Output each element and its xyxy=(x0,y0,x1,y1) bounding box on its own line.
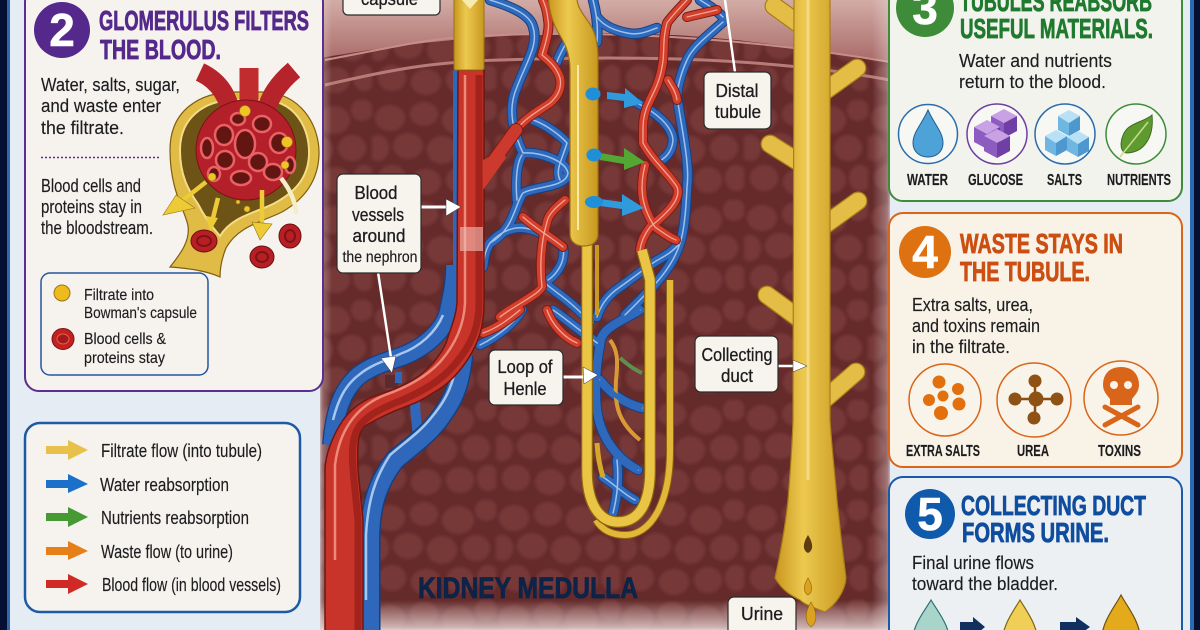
red capillary network xyxy=(483,0,717,343)
icon: glucose: GLUCOSE xyxy=(968,172,1023,189)
icon: urea molecule xyxy=(997,363,1071,460)
large red artery xyxy=(325,70,506,630)
arrow: blood flow xyxy=(46,574,281,595)
heading 5: FORMS URINE. xyxy=(962,517,1109,548)
heading 5 xyxy=(961,490,1146,548)
text: filtrate description xyxy=(41,75,180,138)
vessel junction marker xyxy=(385,372,402,388)
text: waste description: and toxins remain xyxy=(912,316,1040,336)
badge 4: 4 xyxy=(912,226,938,278)
blue capillary network xyxy=(480,0,723,513)
icon: water: WATER xyxy=(907,172,948,189)
icon: salts xyxy=(1035,104,1095,189)
text: urine flows xyxy=(912,553,1058,594)
icon: toxins skull xyxy=(1084,361,1158,460)
label: distal tubule: tubule xyxy=(715,102,761,122)
arrow: water reabsorption: Water reabsorption xyxy=(100,475,229,495)
text: blood cells description: the bloodstream. xyxy=(41,218,153,238)
text: blood cells description: Blood cells and xyxy=(41,176,141,196)
arrow: yellow to amber xyxy=(1060,617,1090,630)
icon: extra salts xyxy=(906,364,981,460)
icon: urea molecule: UREA xyxy=(1017,443,1049,460)
loop of Henle xyxy=(587,240,670,535)
key: filtrate and blood cells: proteins stay xyxy=(84,350,165,367)
central tubule xyxy=(548,0,598,246)
icon: nutrients leaf xyxy=(1106,104,1171,189)
heading 4: WASTE STAYS IN xyxy=(960,228,1123,259)
left page edge xyxy=(0,0,10,630)
text: urine flows: Final urine flows xyxy=(912,553,1034,573)
key: filtrate and blood cells: Filtrate into xyxy=(84,287,154,304)
badge 5: 5 xyxy=(917,488,943,540)
label: blood vessels around the nephron: the nephron xyxy=(342,249,418,266)
key: filtrate and blood cells xyxy=(41,273,208,375)
label: distal tubule xyxy=(704,0,771,129)
text: water and nutrients: Water and nutrients xyxy=(959,51,1112,71)
arrow: water reabsorption xyxy=(46,474,229,495)
label: blood vessels around the nephron: around xyxy=(352,226,406,246)
text: filtrate description: and waste enter xyxy=(41,96,161,116)
panel 2: glomerulus filters the blood xyxy=(25,0,323,391)
text: blood cells description: proteins stay in xyxy=(41,197,142,217)
label: urine: Urine xyxy=(741,604,783,624)
icon: amber urine drop xyxy=(1101,595,1141,630)
icon: dilute urine drop xyxy=(912,600,950,630)
reabsorption arrows xyxy=(585,88,645,216)
badge 2: 2 xyxy=(49,4,75,56)
panel 3: tubules reabsorb useful materials xyxy=(889,0,1182,201)
badge 2 xyxy=(34,2,90,58)
icon: yellow urine drop xyxy=(1002,600,1038,630)
large blue vein upper xyxy=(332,70,456,445)
label: blood vessels around the nephron: vessels xyxy=(352,205,404,225)
text: filtrate description: Water, salts, sugar, xyxy=(41,75,180,95)
heading 3 xyxy=(960,0,1153,44)
key: filtrate and blood cells: Blood cells & xyxy=(84,331,166,348)
text: blood cells description xyxy=(41,176,153,238)
arrow: waste flow xyxy=(46,541,233,562)
heading 4 xyxy=(960,228,1123,287)
label: distal tubule: Distal xyxy=(716,81,758,101)
tissue: kidney medulla background xyxy=(320,0,890,630)
icon: water xyxy=(898,104,958,189)
arrow: blood flow: Blood flow (in blood vessels) xyxy=(102,575,281,595)
text: waste description: in the filtrate. xyxy=(912,337,1010,357)
large blue vein lower xyxy=(366,355,463,630)
red vessel branch xyxy=(475,130,516,188)
badge 3 xyxy=(896,0,954,37)
icon: glucose xyxy=(967,104,1027,189)
icon: nutrients leaf: NUTRIENTS xyxy=(1107,172,1171,189)
label: collecting duct: duct xyxy=(721,366,753,386)
illustration: glomerulus in Bowman's capsule xyxy=(163,68,319,277)
icon: salts: SALTS xyxy=(1047,172,1082,189)
label: blood vessels around the nephron: Blood xyxy=(354,183,398,203)
text: urine flows: toward the bladder. xyxy=(912,574,1058,594)
arrow: waste flow: Waste flow (to urine) xyxy=(101,542,233,562)
label: collecting duct xyxy=(695,336,807,392)
arrow: filtrate flow: Filtrate flow (into tubule) xyxy=(101,441,262,461)
heading 2 xyxy=(99,5,309,65)
text: waste description: Extra salts, urea, xyxy=(912,295,1033,315)
right page edge xyxy=(1190,0,1200,630)
label: loop of Henle: Loop of xyxy=(498,357,553,377)
text: water and nutrients: return to the blood. xyxy=(959,72,1106,92)
arrow: dilute to yellow xyxy=(960,617,985,630)
label: loop of Henle: Henle xyxy=(504,379,546,399)
icon: toxins skull: TOXINS xyxy=(1098,443,1141,460)
badge 5 xyxy=(905,488,955,540)
text: water and nutrients xyxy=(959,51,1112,92)
arrow: filtrate flow xyxy=(46,440,262,461)
label: collecting duct: Collecting xyxy=(702,345,772,365)
heading 4: THE TUBULE. xyxy=(960,256,1090,287)
badge 4 xyxy=(899,226,951,278)
heading: kidney medulla: KIDNEY MEDULLA xyxy=(418,572,638,605)
label: urine xyxy=(728,597,796,630)
yellow proximal tube xyxy=(454,0,484,70)
key: filtrate and blood cells: Bowman's capsule xyxy=(84,305,197,322)
text: waste description xyxy=(912,295,1040,357)
legend: flow arrows xyxy=(25,423,300,612)
label: blood vessels around the nephron xyxy=(337,174,461,373)
arrow: nutrients reabsorption: Nutrients reabsorption xyxy=(101,508,249,528)
heading 2: GLOMERULUS FILTERS xyxy=(99,5,309,36)
panel 5: collecting duct forms urine xyxy=(889,477,1182,630)
text: filtrate description: the filtrate. xyxy=(41,118,124,138)
arrow: nutrients reabsorption xyxy=(46,507,249,528)
label: loop of Henle xyxy=(489,350,598,405)
collecting duct xyxy=(767,0,858,627)
label: capsule xyxy=(343,0,440,15)
heading 2: THE BLOOD. xyxy=(100,34,221,65)
panel 4: waste stays in the tubule xyxy=(889,213,1182,467)
icon: extra salts: EXTRA SALTS xyxy=(906,443,980,460)
